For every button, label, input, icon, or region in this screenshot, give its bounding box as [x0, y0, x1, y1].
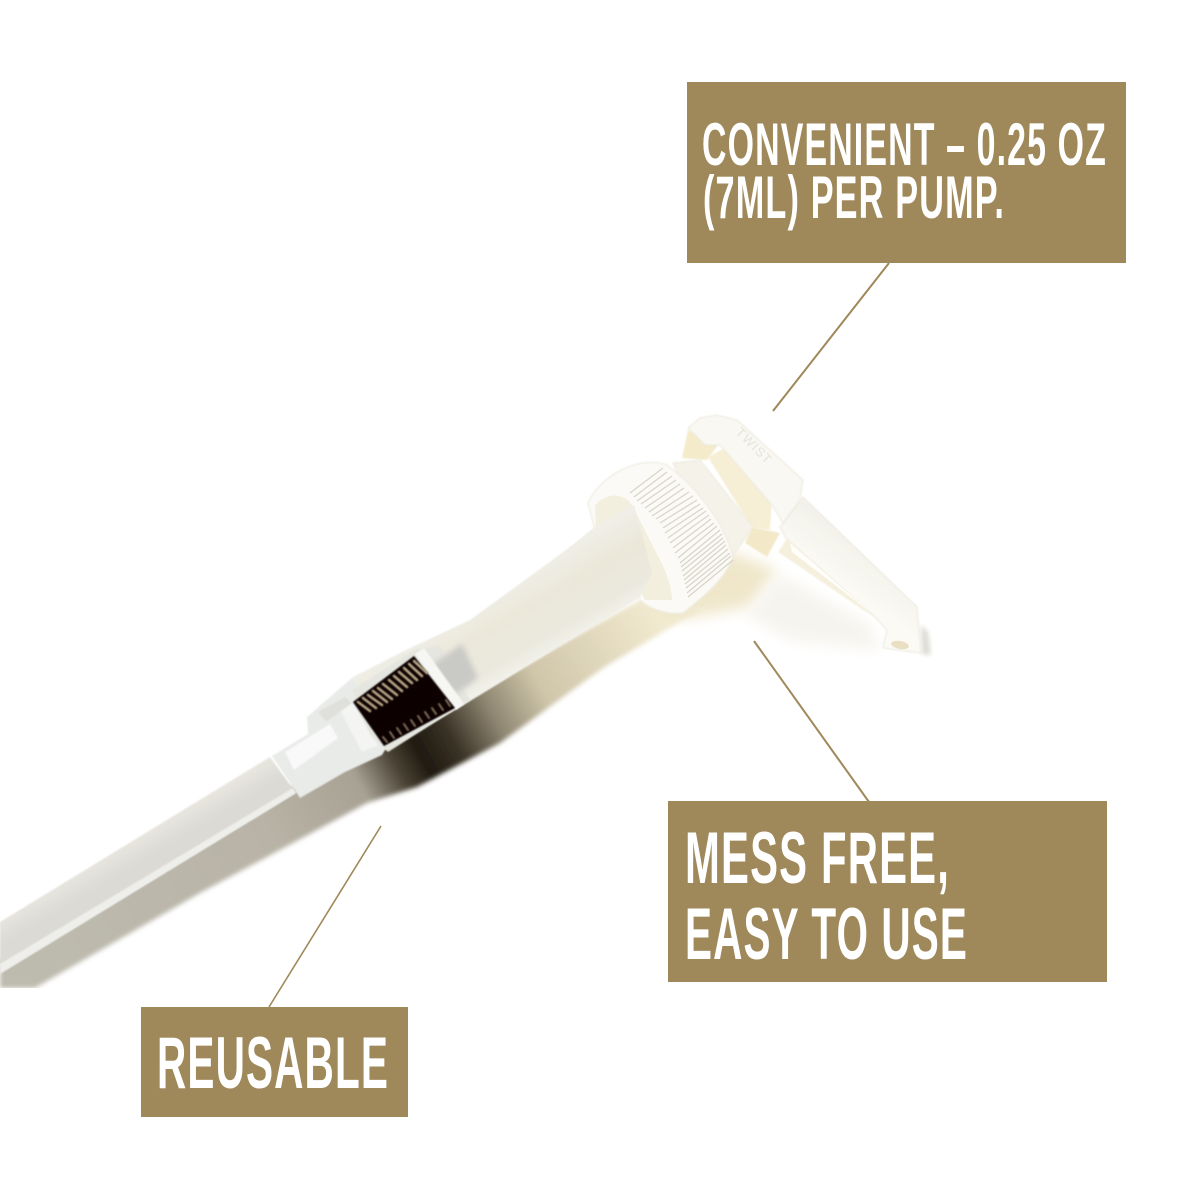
shadow under pump	[0, 540, 931, 1002]
dip tube	[0, 757, 296, 973]
cap opening	[595, 496, 672, 600]
spring	[353, 656, 455, 746]
callout: reusable	[141, 1007, 408, 1117]
leader line: convenient	[773, 263, 889, 411]
leader line: mess free	[754, 641, 869, 802]
callout: convenient	[687, 82, 1126, 263]
screw cap	[570, 460, 753, 640]
photo: pump dispenser	[0, 415, 931, 1002]
callout: mess free: EASY TO USE	[685, 894, 968, 975]
callout: mess free	[668, 801, 1107, 982]
pump head: TWIST	[733, 425, 776, 467]
pump cylinder	[352, 510, 660, 752]
pump head	[682, 415, 803, 557]
leader line: reusable	[269, 826, 381, 1007]
callout: mess free: MESS FREE,	[685, 818, 950, 899]
valve collar	[272, 677, 388, 798]
callout: reusable: REUSABLE	[157, 1023, 389, 1104]
ribbed band	[630, 468, 733, 597]
pump lever	[778, 497, 921, 653]
tube edge highlight	[0, 788, 296, 974]
